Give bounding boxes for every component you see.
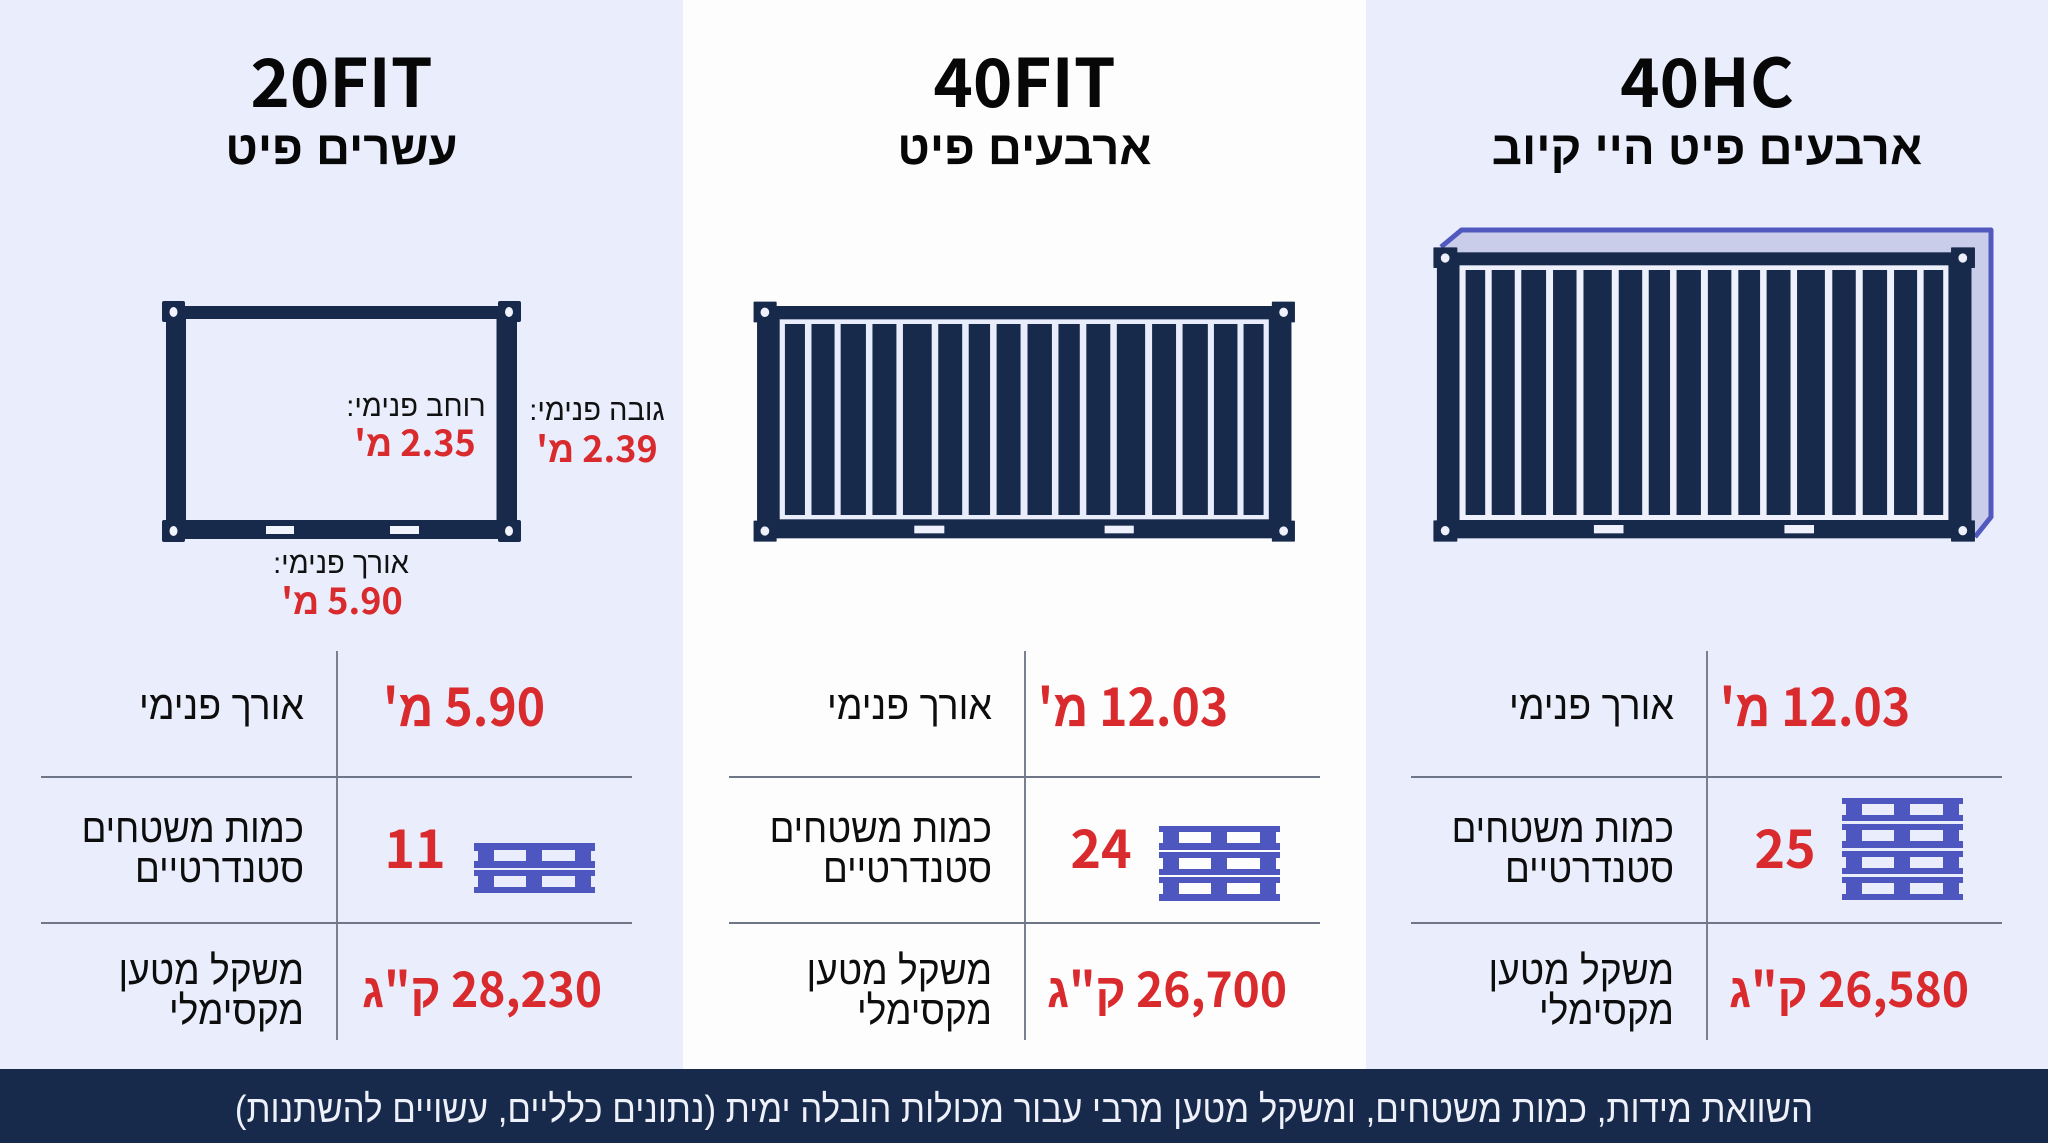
value: max payload: 26,580 ק"ג xyxy=(1729,951,1969,1021)
row label: max payload: משקל מטען xyxy=(1489,949,1674,993)
heading: 40FIT: 40FIT xyxy=(933,30,1116,127)
value: pallet count: 25 xyxy=(1754,808,1816,883)
dimension label: inner length: אורך פנימי: xyxy=(273,547,409,580)
value: inner length: 12.03 מ' xyxy=(1038,666,1228,741)
row label: max payload: משקל מטען xyxy=(119,949,304,993)
footer banner xyxy=(0,1069,2048,1143)
row label: standard pallets: כמות משטחים xyxy=(1452,807,1674,851)
row label: max payload: משקל מטען xyxy=(807,949,992,993)
row label: inner length: אורך פנימי xyxy=(139,684,304,728)
dimension label: inner width: רוחב פנימי: xyxy=(346,390,486,423)
dimension label: inner length: 5.90 מ' xyxy=(281,573,403,625)
illustration: 40HC container with extra height xyxy=(1433,228,1994,542)
panel: 20FIT xyxy=(0,0,683,1069)
row label: standard pallets: סטנדרטיים xyxy=(823,847,992,891)
panel: 40HC xyxy=(1366,0,2048,1069)
table: 40FIT specifications xyxy=(729,651,1320,1040)
value: pallet count: 11 xyxy=(384,808,446,883)
row label: standard pallets xyxy=(770,807,992,891)
row label: inner length: אורך פנימי xyxy=(827,684,992,728)
icon: pallets xyxy=(474,843,595,893)
dimension label: inner height: גובה פנימי: xyxy=(529,394,665,427)
icon: pallets xyxy=(1842,798,1963,900)
row label: standard pallets: סטנדרטיים xyxy=(135,847,304,891)
heading: 40HC: 40HC xyxy=(1620,30,1794,127)
row label: standard pallets: סטנדרטיים xyxy=(1505,847,1674,891)
subheading: forty feet: ארבעים פיט xyxy=(897,122,1152,175)
heading: 20FIT: 20FIT xyxy=(250,30,433,127)
row label: max payload xyxy=(119,949,304,1033)
row label: standard pallets xyxy=(1452,807,1674,891)
row label: max payload xyxy=(807,949,992,1033)
dimension label: inner height: 2.39 מ' xyxy=(536,421,658,473)
table: 20FIT specifications xyxy=(41,651,632,1040)
value: max payload: 28,230 ק"ג xyxy=(362,951,602,1021)
subheading: twenty feet: עשרים פיט xyxy=(225,122,458,175)
dimension label: inner width: 2.35 מ' xyxy=(354,415,476,467)
row label: inner length: אורך פנימי xyxy=(1509,684,1674,728)
subheading: forty feet high cube: ארבעים פיט היי קיוב xyxy=(1492,122,1922,175)
row label: standard pallets xyxy=(82,807,304,891)
dimension label: inner height xyxy=(529,394,665,473)
row label: max payload: מקסימלי xyxy=(169,989,304,1033)
table: 40HC specifications xyxy=(1411,651,2002,1040)
footer caption: השוואת מידות, כמות משטחים, ומשקל מטען מרבי עבור מכולות הובלה ימית (נתונים כלליים, עשויים להשתנות) xyxy=(235,1089,1813,1131)
dimension label: inner width xyxy=(346,390,486,467)
row label: max payload xyxy=(1489,949,1674,1033)
icon: pallets xyxy=(1159,826,1280,901)
dimension label: inner length xyxy=(273,547,409,625)
value: inner length: 5.90 מ' xyxy=(383,666,545,741)
illustration: 40ft container xyxy=(754,302,1295,542)
value: max payload: 26,700 ק"ג xyxy=(1047,951,1287,1021)
row label: max payload: מקסימלי xyxy=(1539,989,1674,1033)
value: inner length: 12.03 מ' xyxy=(1720,666,1910,741)
value: pallet count: 24 xyxy=(1070,808,1132,883)
row label: max payload: מקסימלי xyxy=(857,989,992,1033)
row label: standard pallets: כמות משטחים xyxy=(770,807,992,851)
panel: 40FIT xyxy=(683,0,1366,1069)
row label: standard pallets: כמות משטחים xyxy=(82,807,304,851)
illustration: 20ft container outline xyxy=(162,301,521,542)
